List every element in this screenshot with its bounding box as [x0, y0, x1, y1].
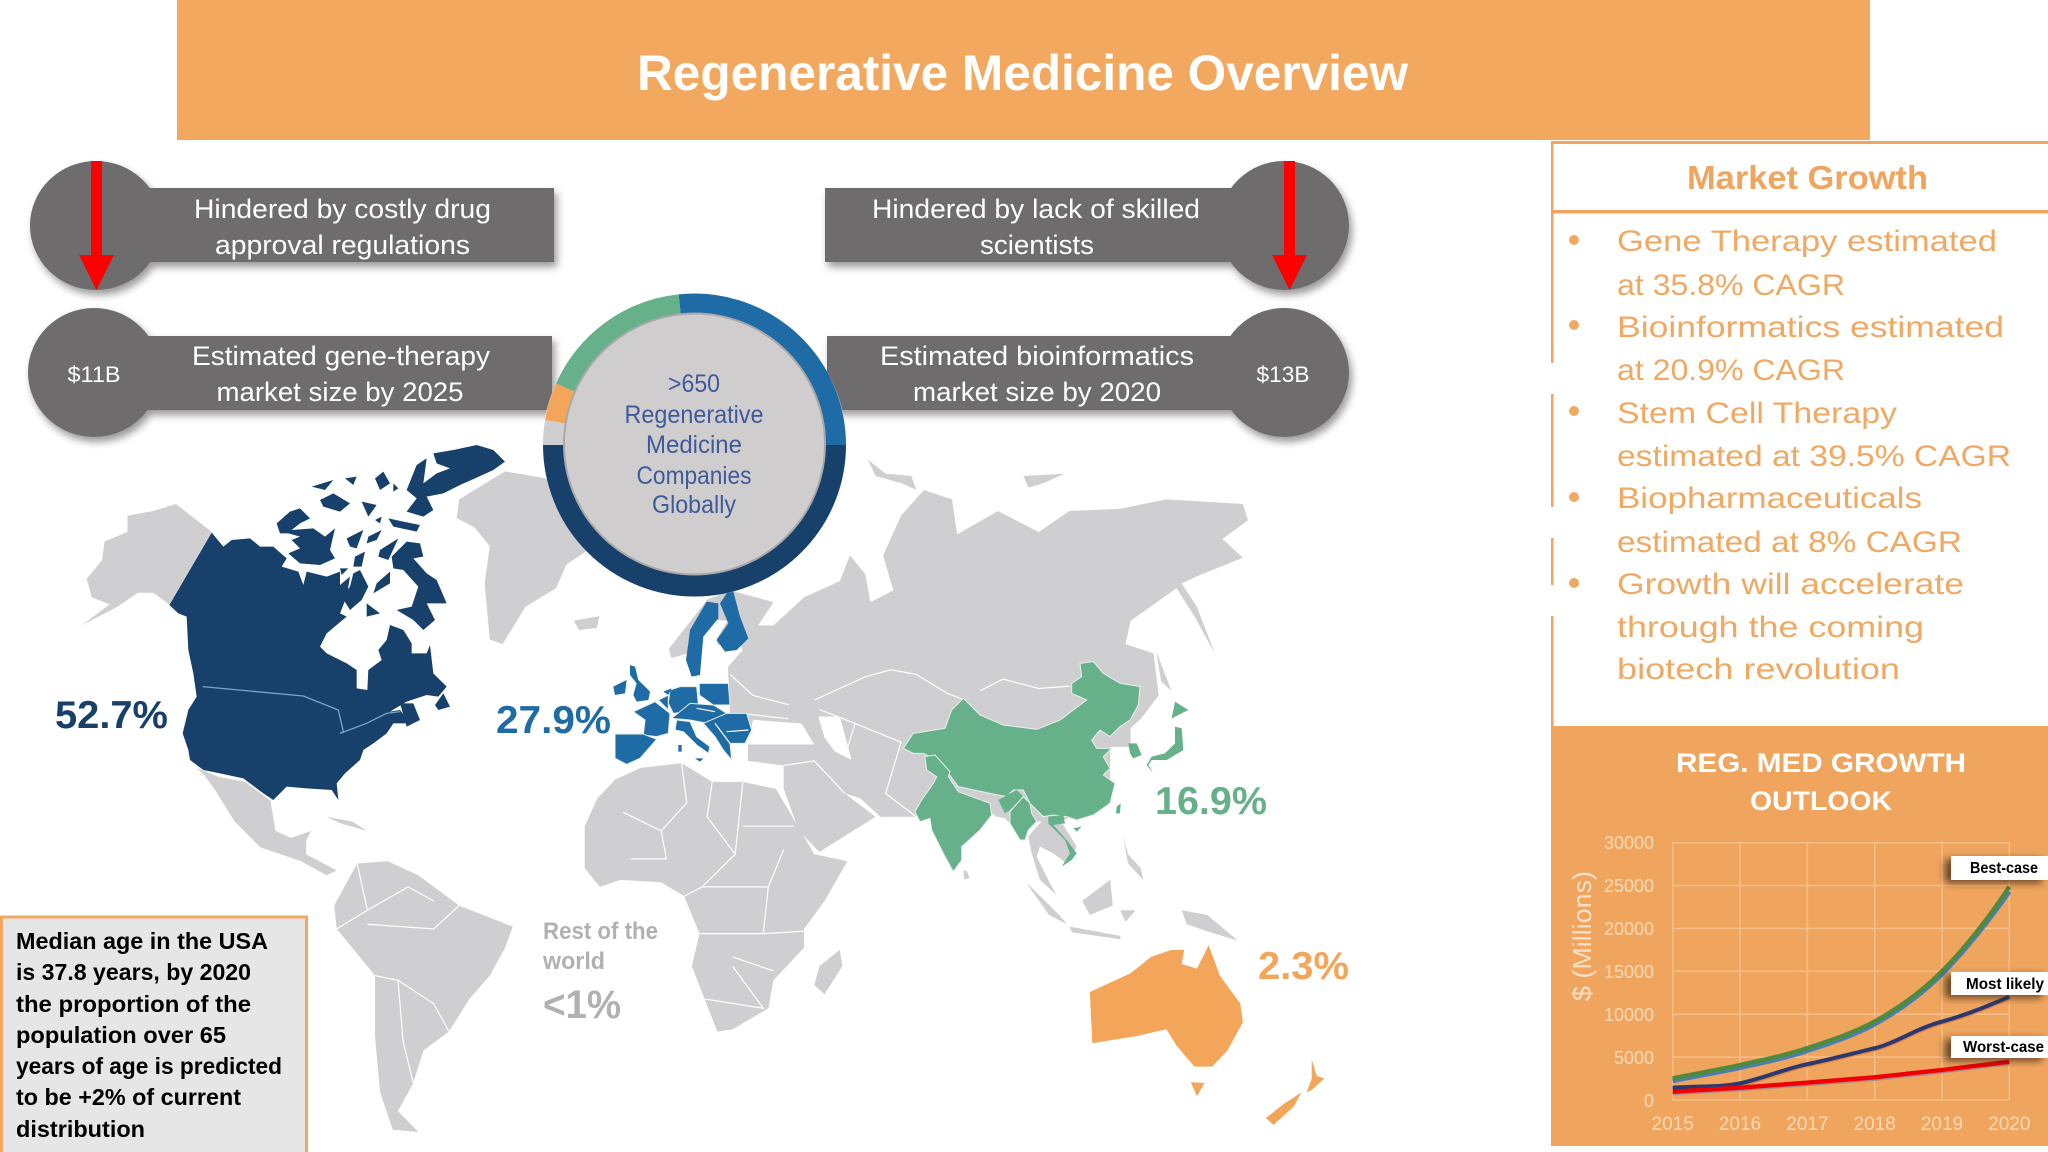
chart gridlines: [1673, 843, 2009, 1100]
label: Europe share: 27.9%: [496, 699, 611, 742]
pill: bioinformatics market size: market size by 2020: [913, 377, 1161, 407]
donut centre text: [624, 370, 764, 519]
pill: gene therapy market size: $11B: [68, 362, 120, 387]
x axis labels: 2015: [1652, 1114, 1694, 1135]
title: Regenerative Medicine Overview: [637, 45, 1408, 101]
series label: most likely: [1951, 972, 2048, 995]
map: grey land west: [82, 471, 599, 1132]
y axis labels: 15000: [1604, 962, 1654, 982]
callout: median age: population over 65: [16, 1022, 226, 1048]
chart lines: [1673, 887, 2009, 1094]
x axis labels: [1652, 1114, 2030, 1135]
panel: growth outlook chart: [1551, 726, 2048, 1146]
series label: most likely: Most likely: [1966, 976, 2044, 993]
map: Southeast Asia grey: [963, 803, 1077, 895]
bullet list: estimated at 8% CAGR: [1617, 526, 1962, 559]
bullet list: estimated at 39.5% CAGR: [1617, 440, 2011, 473]
label: Oceania share: 2.3%: [1258, 945, 1349, 988]
bullet list: through the coming: [1617, 611, 1924, 644]
label: rest of the world: <1%: [543, 983, 621, 1027]
map: grey land east: [585, 460, 1248, 1032]
donut chart: companies by region: [542, 296, 846, 594]
bullet list: Gene Therapy estimated: [1617, 225, 1997, 258]
icon: red down arrow: [79, 161, 114, 290]
y axis labels: 10000: [1604, 1005, 1654, 1025]
bullet list: Growth will accelerate: [1617, 568, 1964, 601]
pill: lack of skilled scientists: Hindered by lack of skilled: [872, 194, 1200, 224]
chart title: OUTLOOK: [1750, 786, 1893, 816]
pill: costly drug approval: approval regulations: [215, 230, 470, 260]
map: Asia green: [903, 662, 1188, 872]
label: rest of the world: [542, 918, 658, 1027]
pill: gene therapy market size: Estimated gene-therapy: [192, 341, 491, 371]
x axis labels: 2018: [1854, 1114, 1896, 1135]
series label: best-case: Best-case: [1970, 860, 2038, 877]
bullet list: at 20.9% CAGR: [1617, 354, 1845, 387]
label: Asia share: 16.9%: [1155, 780, 1267, 823]
pill: gene therapy market size: [28, 308, 552, 437]
x axis labels: 2016: [1719, 1114, 1761, 1135]
donut centre text: Globally: [652, 491, 736, 519]
y axis labels: 5000: [1614, 1048, 1654, 1068]
y axis labels: 25000: [1604, 876, 1654, 896]
pill: lack of skilled scientists: [825, 161, 1349, 290]
pill: gene therapy market size: market size by 2025: [216, 377, 464, 407]
header banner: [177, 0, 1870, 140]
bullet list: Biopharmaceuticals: [1617, 482, 1922, 515]
pill: bioinformatics market size: $13B: [1256, 362, 1310, 387]
x axis labels: 2020: [1988, 1114, 2030, 1135]
callout: median age: Median age in the USA: [16, 928, 268, 954]
icon: red down arrow: [1272, 161, 1307, 290]
bullet list: at 35.8% CAGR: [1617, 269, 1845, 302]
bullet list: Stem Cell Therapy: [1617, 397, 1897, 430]
chart title: REG. MED GROWTH: [1676, 748, 1966, 778]
y axis labels: [1604, 833, 1654, 1111]
panel heading: Market Growth: [1687, 159, 1928, 196]
pill: lack of skilled scientists: scientists: [980, 230, 1094, 260]
world map: [82, 445, 1324, 1132]
label: rest of the world: Rest of the: [543, 918, 658, 945]
y axis labels: 20000: [1604, 919, 1654, 939]
label: North America share: 52.7%: [55, 694, 168, 737]
pill: costly drug approval: [30, 161, 554, 290]
y axis title: $ (Millions): [1567, 871, 1597, 1001]
map: Europe blue: [613, 592, 752, 764]
callout: median age: distribution: [16, 1116, 145, 1142]
pill: bioinformatics market size: Estimated bioinformatics: [880, 341, 1194, 371]
bullet list: Bioinformatics estimated: [1617, 311, 2004, 344]
y axis labels: 0: [1644, 1091, 1654, 1111]
series label: worst-case: [1951, 1036, 2048, 1058]
x axis labels: 2017: [1786, 1114, 1829, 1135]
callout: median age: to be +2% of current: [16, 1084, 241, 1110]
bullet list: biotech revolution: [1617, 653, 1900, 686]
y axis labels: 30000: [1604, 833, 1654, 853]
pill: bioinformatics market size: [827, 308, 1349, 437]
callout: median age: is 37.8 years, by 2020: [16, 959, 251, 985]
bullet list: [1569, 225, 2011, 686]
callout: median age: [2, 917, 306, 1152]
pill: costly drug approval: Hindered by costly drug: [194, 194, 491, 224]
label: rest of the world: world: [542, 948, 605, 975]
chart title: [1676, 748, 1966, 816]
callout: median age: the proportion of the: [16, 991, 251, 1017]
panel: market growth: [1551, 141, 2048, 726]
x axis labels: 2019: [1921, 1114, 1963, 1135]
donut centre text: >650: [668, 370, 720, 398]
series label: best-case: [1951, 856, 2048, 880]
donut centre text: Companies: [636, 462, 752, 490]
donut centre text: Medicine: [646, 431, 742, 459]
map: North America navy: [169, 445, 505, 800]
map: Oceania orange: [1090, 945, 1324, 1125]
callout: median age: years of age is predicted: [16, 1053, 282, 1079]
series label: worst-case: Worst-case: [1963, 1039, 2044, 1056]
donut centre text: Regenerative: [624, 401, 764, 429]
